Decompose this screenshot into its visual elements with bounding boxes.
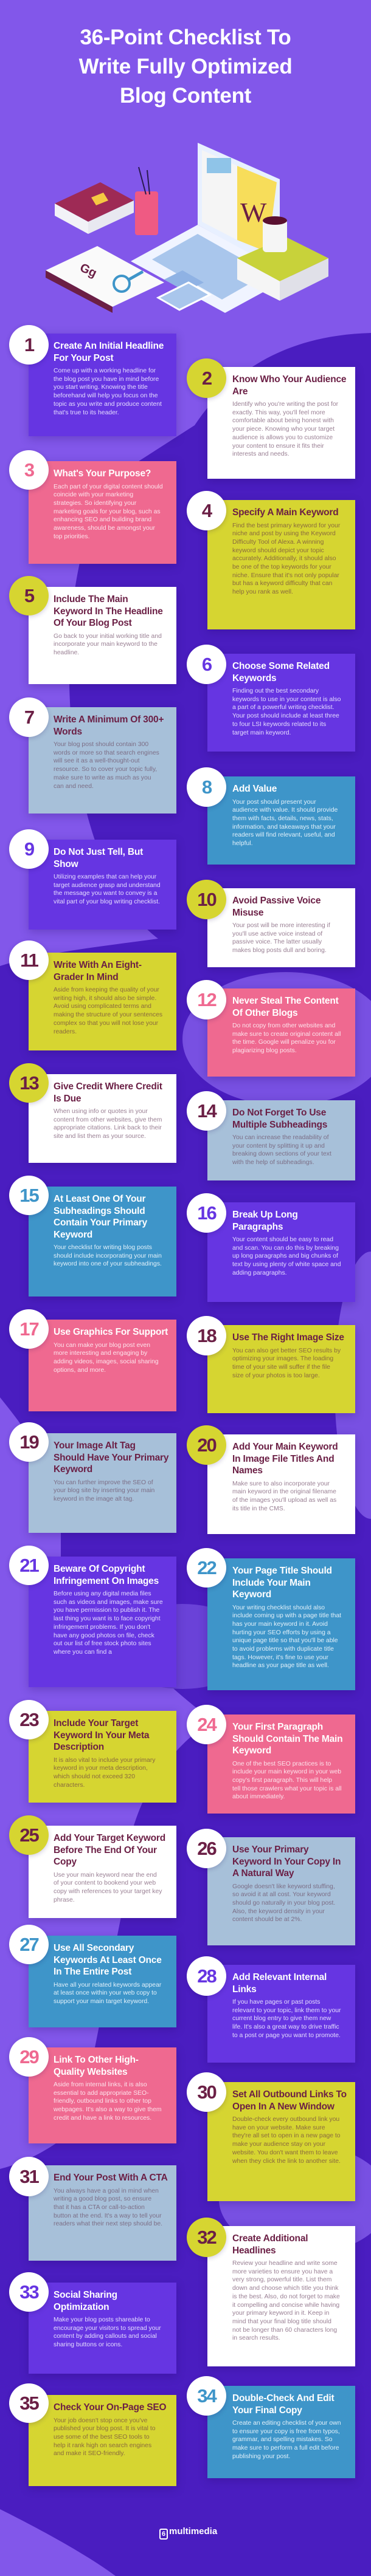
- item 22: Your Page Title Should Include Your Main Keyword: [232, 1566, 332, 1600]
- item 20: [207, 1434, 355, 1534]
- circle 17: 17: [19, 1318, 38, 1340]
- item 25: [29, 1826, 176, 1918]
- circle 22: [187, 1548, 226, 1588]
- item 34: [207, 2386, 355, 2478]
- circle 6: 6: [202, 654, 211, 675]
- item 33: Make your blog posts shareable to encourage your visitors to spread your content by adding callouts and social sharing buttons or icons.: [54, 2317, 161, 2348]
- circle 26: [187, 1829, 226, 1868]
- item 33: Social Sharing Optimization: [54, 2290, 117, 2312]
- circle 18: 18: [197, 1325, 216, 1346]
- circle 23: [9, 1700, 49, 1739]
- item 31: You always have a goal in mind when writing a good blog post, so ensure that it has a CTA or call-to-action button at the end. It's a way to tell your readers what their next step should be.: [54, 2187, 162, 2227]
- item 8: [207, 776, 355, 865]
- item 22: [207, 1558, 355, 1690]
- circle 7: [9, 697, 49, 737]
- item 8: Add Value: [232, 784, 277, 794]
- item 29: Aside from internal links, it is also essential to add appropriate SEO-friendly, outbound links to other top webpages. It's also a way to give them credit and have a link to resources.: [54, 2081, 162, 2122]
- circle 16: 16: [197, 1202, 216, 1224]
- circle 16: [187, 1193, 226, 1233]
- item 14: Do Not Forget To Use Multiple Subheadings: [232, 1108, 327, 1130]
- item 26: Use Your Primary Keyword In Your Copy In A Natural Way: [232, 1845, 341, 1879]
- circle 27: 27: [19, 1934, 38, 1955]
- circle 15: [9, 1176, 49, 1215]
- title: Blog Content: [120, 84, 251, 108]
- circle 13: [9, 1063, 49, 1103]
- item 35: Check Your On-Page SEO: [54, 2402, 166, 2413]
- phone: [158, 283, 210, 310]
- circle 1: 1: [24, 334, 33, 355]
- item 7: Your blog post should contain 300 words or more so that search engines will see it as a well-thought-out resource. So to cover your topic fully, make sure to write as much as you can and need.: [54, 741, 159, 790]
- item 30: Double-check every outbound link you have on your website. Make sure they're all set to open in a new page to make your audience stay on your website. You don't want them to leave when they click the link to another site.: [232, 2116, 341, 2165]
- item 2: [207, 367, 355, 479]
- circle 29: 29: [19, 2046, 38, 2067]
- circle 33: [9, 2272, 49, 2312]
- title: 36-Point Checklist To: [80, 26, 291, 49]
- item 9: [29, 840, 176, 930]
- item 32: Review your headline and write some more varieties to ensure you have a very strong, powerful title. List them down and choose which title you think is the best. Also, do not forget to make it compelling and concise while having your primary keyword in it. Keep in mind that your final blog title should not be longer than 60 characters long in search results.: [232, 2260, 340, 2341]
- item 16: Your content should be easy to read and scan. You can do this by breaking up long paragraphs and big chunks of text by using plenty of white space and adding paragraphs.: [232, 1236, 341, 1276]
- circle 33: 33: [19, 2281, 38, 2303]
- item 10: [207, 888, 355, 967]
- circle 5: [9, 576, 49, 615]
- item 4: [207, 500, 355, 629]
- item 18: You can also get better SEO results by optimizing your images. The loading time of your site will suffer if the file size of your photos is too large.: [232, 1348, 341, 1379]
- item 15: At Least One Of Your Subheadings Should Contain Your Primary Keyword: [54, 1194, 147, 1239]
- red book: [55, 182, 134, 234]
- circle 20: 20: [197, 1434, 216, 1456]
- item 28: [207, 1965, 355, 2063]
- item 4: Specify A Main Keyword: [232, 507, 338, 518]
- item 14: [207, 1100, 355, 1180]
- item 29: Link To Other High-Quality Websites: [54, 2055, 139, 2077]
- item 4: Find the best primary keyword for your niche and post by using the Keyword Difficulty Tool of Alexa. A winning keyword should depict your topic accurately. Additionally, it should also be one of the top keywords for your niche. Ensure that it's not only popular but has a keyword difficulty that can help you rank as well.: [232, 522, 340, 595]
- item 14: You can increase the readability of your content by splitting it up and breaking down sections of your text with the help of subheadings.: [232, 1134, 331, 1166]
- item 3: What's Your Purpose?: [54, 468, 151, 479]
- circle 31: [9, 2157, 49, 2196]
- circle 12: [187, 980, 226, 1019]
- item 28: If you have pages or past posts relevant to your topic, link them to your current blog entry to give them new life. It's also a great way to drive traffic to a post or page you want to promote.: [232, 1999, 341, 2039]
- item 18: Use The Right Image Size: [232, 1332, 344, 1343]
- circle 34: 34: [197, 2385, 216, 2406]
- item 13: [29, 1074, 176, 1163]
- item 5: Go back to your initial working title and incorporate your main keyword to the headline.: [54, 633, 162, 656]
- circle 15: 15: [19, 1185, 38, 1206]
- item 26: Google doesn't like keyword stuffing, so avoid it at all cost. Your keyword should go naturally in your blog post. Also, the keyword density in your content should be at 2%.: [232, 1883, 335, 1923]
- circle 17: [9, 1309, 49, 1349]
- item 15: Your checklist for writing blog posts should include incorporating your main keyword into one of your subheadings.: [54, 1244, 162, 1267]
- circle 30: 30: [197, 2081, 216, 2103]
- circle 11: 11: [20, 950, 38, 971]
- item 6: Finding out the best secondary keywords to use in your content is also a part of a powerful writing checklist. Your post should include at least three to four LSI keywords related to its target main keyword.: [232, 688, 341, 736]
- laptop: W: [240, 197, 267, 228]
- circle 11: [9, 940, 49, 980]
- circle 24: [187, 1705, 226, 1744]
- item 8: Your post should present your audience with value. It should provide them with facts, details, news, stats, information, and takeaways that your readers will find relevant, useful, and helpful.: [232, 798, 338, 847]
- stacked books and mug: [237, 216, 328, 301]
- item 32: [207, 2226, 355, 2366]
- item 21: Beware Of Copyright Infringement On Images: [54, 1564, 159, 1586]
- circle 14: [187, 1091, 226, 1131]
- item 15: [29, 1187, 176, 1297]
- item 12: Never Steal The Content Of Other Blogs: [232, 996, 339, 1018]
- item 5: [29, 587, 176, 684]
- item 1: Create An Initial Headline For Your Post: [54, 341, 164, 363]
- circle 2: 2: [202, 368, 211, 389]
- item 1: [29, 334, 176, 436]
- circle 27: [9, 1925, 49, 1964]
- circle 24: 24: [197, 1714, 216, 1735]
- item 32: Create Additional Headlines: [232, 2233, 308, 2255]
- item 23: It is also vital to include your primary keyword in your meta description, which should not exceed 320 characters.: [54, 1757, 155, 1789]
- item 3: [29, 461, 176, 564]
- item 19: You can further improve the SEO of your blog site by inserting your main keyword in the image alt tag.: [54, 1479, 154, 1502]
- item 13: Give Credit Where Credit Is Due: [54, 1081, 162, 1103]
- circle 13: 13: [19, 1072, 38, 1094]
- circle 5: 5: [24, 585, 33, 606]
- item 17: You can make your blog post even more interesting and engaging by adding videos, images, social sharing options, and more.: [54, 1341, 159, 1374]
- circle 10: 10: [197, 889, 216, 910]
- circle 1: [9, 325, 49, 365]
- item 2: Know Who Your Audience Are: [232, 374, 346, 396]
- item 20: Make sure to also incorporate your main keyword in the original filename of the images you'll upload as well as its title in the CMS.: [232, 1480, 336, 1512]
- circle 8: [187, 767, 226, 807]
- item 28: Add Relevant Internal Links: [232, 1972, 327, 1994]
- circle 4: [187, 491, 226, 530]
- circle 25: [9, 1815, 49, 1855]
- item 9: Utilizing examples that can help your target audience grasp and understand the message you want to convey is a vital part of your blog writing checklist.: [54, 874, 161, 905]
- item 35: [29, 2395, 176, 2486]
- item 11: Write With An Eight-Grader In Mind: [54, 960, 142, 982]
- circle 8: 8: [202, 776, 211, 798]
- item 16: Break Up Long Paragraphs: [232, 1210, 298, 1232]
- item 27: Use All Secondary Keywords At Least Once In The Entire Post: [54, 1943, 162, 1977]
- pencil cup: [135, 167, 158, 235]
- circle 20: [187, 1425, 226, 1465]
- logo: 6: [162, 2530, 165, 2538]
- circle 35: 35: [19, 2393, 38, 2414]
- circle 18: [187, 1316, 226, 1355]
- item 11: Aside from keeping the quality of your writing high, it should also be simple. Avoid using complicated terms and making the structure of your sentences complex so that you will not lose your readers.: [54, 987, 162, 1035]
- circle 22: 22: [197, 1557, 216, 1578]
- item 7: Write A Minimum Of 300+ Words: [54, 714, 164, 736]
- circle 9: [9, 829, 49, 869]
- circle 28: 28: [197, 1965, 216, 1987]
- item 1: Come up with a working headline for the blog post you have in mind before you start writing. Knowing the title beforehand will help you focus on the topic as you write and produce content that's true to its header.: [54, 368, 162, 416]
- circle 35: [9, 2383, 49, 2423]
- item 21: [29, 1557, 176, 1687]
- item 27: Have all your related keywords appear at least once within your web copy to support your main target keyword.: [54, 1982, 161, 2005]
- item 25: Add Your Target Keyword Before The End Of Your Copy: [54, 1833, 165, 1867]
- illustration: desk with laptop and books: [46, 143, 328, 313]
- item 16: [207, 1202, 355, 1302]
- item 12: Do not copy from other websites and make sure to create original content all the time. Google will penalize you for plagiarizing blog posts.: [232, 1023, 341, 1054]
- item 22: Your writing checklist should also include coming up with a page title that has your main keyword in it. Avoid hurting your SEO efforts by using a unique page title so that you'll be able to avoid problems with duplicate title tags. However, it's fine to use your headline as your page title as well.: [232, 1604, 341, 1669]
- book Gg: Gg: [78, 261, 99, 280]
- item 6: [207, 654, 355, 752]
- item 24: Your First Paragraph Should Contain The Main Keyword: [232, 1722, 342, 1756]
- item 21: Before using any digital media files such as videos and images, make sure you have permission to publish it. The last thing you want is to face copyright infringement problems. If you don't have any good photos on file, check out our list of free stock photo sites where you can find a: [54, 1591, 163, 1656]
- item 6: Choose Some Related Keywords: [232, 661, 330, 683]
- item 34: Create an editing checklist of your own to ensure your copy is free from typos, grammar, and spelling mistakes. So make sure to perform a full edit before publishing your post.: [232, 2420, 341, 2460]
- circle 4: 4: [202, 500, 211, 521]
- item 18: [207, 1325, 355, 1413]
- circle 19: 19: [19, 1431, 38, 1453]
- item 17: [29, 1320, 176, 1411]
- item 27: [29, 1936, 176, 2027]
- circle 19: [9, 1422, 49, 1462]
- circle 32: [187, 2218, 226, 2257]
- circle 21: 21: [19, 1555, 38, 1576]
- item 3: Each part of your digital content should coincide with your marketing strategies. So identifying your marketing goals for your blog, such as enhancing SEO and building brand awareness, should be amongst your top priorities.: [54, 484, 163, 540]
- circle 7: 7: [24, 707, 33, 728]
- item 31: End Your Post With A CTA: [54, 2173, 168, 2183]
- item 31: [29, 2165, 176, 2261]
- circle 3: 3: [24, 459, 33, 481]
- circle 34: [187, 2376, 226, 2416]
- item 23: Include Your Target Keyword In Your Meta Description: [54, 1718, 149, 1752]
- circle 28: [187, 1956, 226, 1996]
- item 7: [29, 707, 176, 814]
- circle 14: 14: [197, 1100, 216, 1122]
- circle 6: [187, 645, 226, 684]
- item 30: [207, 2082, 355, 2201]
- item 33: [29, 2283, 176, 2374]
- item 20: Add Your Main Keyword In Image File Titles And Names: [232, 1442, 338, 1476]
- circle 29: [9, 2037, 49, 2077]
- item 24: One of the best SEO practices is to include your main keyword in your web copy's first paragraph. This will help tell those crawlers what your topic is all about immediately.: [232, 1761, 342, 1800]
- circle 9: 9: [24, 838, 33, 860]
- circle 26: 26: [197, 1838, 216, 1859]
- item 24: [207, 1714, 355, 1814]
- item 35: Your job doesn't stop once you've published your blog post. It is vital to use some of the best SEO tools to help it rank high on search engines and make it SEO-friendly.: [54, 2417, 156, 2457]
- circle 2: [187, 358, 226, 398]
- item 19: Your Image Alt Tag Should Have Your Primary Keyword: [54, 1440, 168, 1475]
- circle 3: [9, 450, 49, 490]
- logo: [159, 2526, 218, 2540]
- item 11: [29, 953, 176, 1050]
- circle 25: 25: [19, 1824, 38, 1846]
- item 29: [29, 2047, 176, 2143]
- circle 30: [187, 2072, 226, 2112]
- item 13: When using info or quotes in your content from other websites, give them appropriate citations. Link back to their site and list them as your source.: [54, 1108, 162, 1140]
- title: [79, 26, 292, 108]
- item 26: [207, 1837, 355, 1945]
- item 30: Set All Outbound Links To Open In A New Window: [232, 2089, 347, 2112]
- circle 21: [9, 1546, 49, 1585]
- circle 10: [187, 880, 226, 919]
- item 25: Use your main keyword near the end of your content to bookend your web copy with references to your target key phrase.: [54, 1871, 162, 1903]
- item 23: [29, 1711, 176, 1803]
- item 9: Do Not Just Tell, But Show: [54, 847, 143, 869]
- logo: multimedia: [169, 2526, 217, 2537]
- item 10: Avoid Passive Voice Misuse: [232, 896, 321, 917]
- item 34: Double-Check And Edit Your Final Copy: [232, 2393, 334, 2416]
- circle 12: 12: [197, 989, 216, 1010]
- circle 31: 31: [19, 2166, 38, 2187]
- item 2: Identify who you're writing the post for exactly. This way, you'll feel more comfortable about being honest with your piece. Knowing who your target audience is allows you to customize your content to ensure it fits their interests and needs.: [232, 401, 338, 457]
- laptop: [131, 143, 292, 313]
- circle 23: 23: [19, 1709, 38, 1730]
- book Gg: [46, 246, 164, 313]
- circle 32: 32: [197, 2227, 216, 2248]
- item 5: Include The Main Keyword In The Headline Of Your Blog Post: [54, 594, 163, 628]
- item 12: [207, 988, 355, 1077]
- item 17: Use Graphics For Support: [54, 1327, 168, 1337]
- item 19: [29, 1433, 176, 1533]
- title: Write Fully Optimized: [79, 55, 292, 78]
- item 10: Your post will be more interesting if you'll use active voice instead of passive voice. The latter usually makes blog posts dull and boring.: [232, 922, 330, 954]
